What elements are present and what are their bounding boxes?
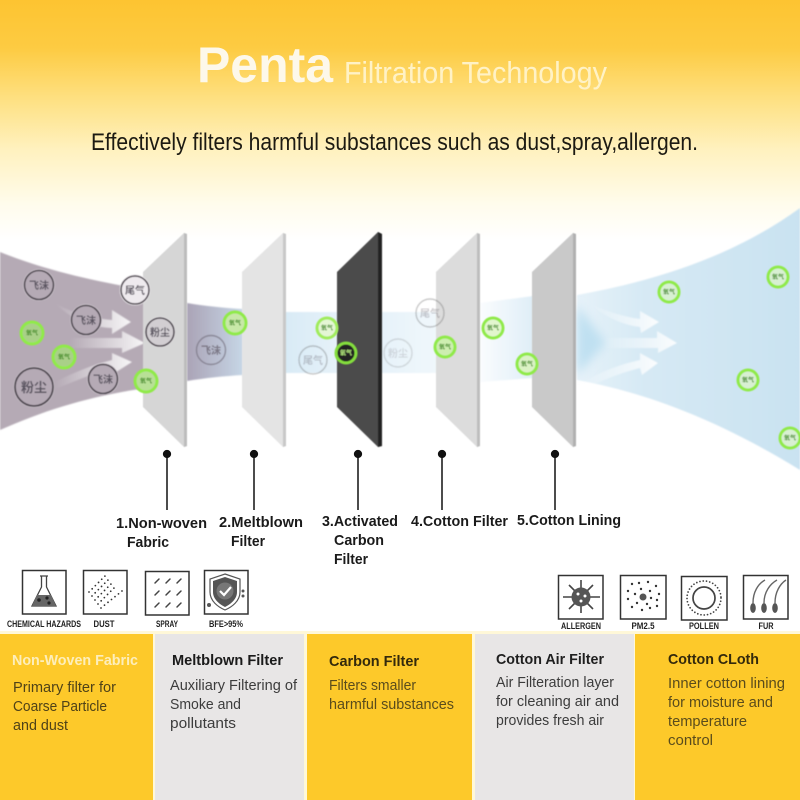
particle: exhaust faded 2: [416, 299, 444, 327]
particle: droplet 2: [70, 304, 102, 336]
panel: carbon filter: Filters smaller: [329, 677, 416, 694]
panel: cotton cloth: control: [668, 732, 713, 749]
oxygen 6: 氧气: [439, 343, 451, 351]
panel: cotton air filter: provides fresh air: [496, 712, 604, 729]
panel: non-woven fabric: Non-Woven Fabric: [12, 652, 138, 669]
icon: spray: [146, 572, 189, 629]
oxygen 8: [517, 354, 537, 374]
label 3: 3.Activated: [322, 513, 398, 530]
panel: non-woven fabric: Primary filter for: [13, 679, 116, 696]
flow: after first filter: [187, 303, 243, 381]
arrow: incoming middle: [70, 331, 145, 353]
pale strip behind panels: [0, 631, 800, 800]
icon: BFE shield: [204, 570, 248, 629]
particle: dust faded: 粉尘: [388, 347, 408, 360]
oxygen 10: [768, 267, 788, 287]
arrow: incoming top: [55, 303, 131, 334]
panel: meltblown filter: Smoke and: [170, 696, 241, 713]
icon: spray: SPRAY: [156, 619, 178, 629]
layer 4: cotton filter: [436, 233, 480, 447]
icon: fur: FUR: [758, 621, 774, 631]
oxygen 3: 氧气: [140, 377, 152, 385]
subtitle: Effectively filters harmful substances such as dust,spray,allergen.: [91, 129, 698, 156]
label 4: 4.Cotton Filter: [411, 513, 508, 530]
layer 3: activated carbon filter: [337, 232, 382, 447]
title: [197, 37, 607, 93]
arrow: outgoing top: [590, 304, 659, 333]
oxygen 9: [659, 282, 679, 302]
air flow bands: [0, 208, 800, 470]
panel: cotton air filter: Air Filteration layer: [496, 674, 614, 691]
particle: exhaust faded 2: 尾气: [420, 307, 440, 320]
oxygen 11: 氧气: [742, 376, 754, 384]
label 2: Filter: [231, 533, 265, 550]
particle: droplet faded: [196, 336, 226, 364]
oxygen on carbon filter: 氧气: [340, 349, 352, 357]
oxygen 1: 氧气: [26, 329, 38, 337]
icon: dust: [84, 570, 127, 629]
particle: dust at filter: [144, 316, 176, 348]
panel: meltblown filter: pollutants: [170, 715, 236, 732]
oxygen 8: 氧气: [521, 360, 533, 368]
particle: droplet 2: 飞沫: [76, 314, 96, 327]
pin 1: [164, 451, 170, 510]
particle: dust large: [14, 366, 54, 408]
particle: droplet 3: [87, 363, 119, 395]
oxygen 12: 氧气: [784, 434, 796, 442]
pin 5: [552, 451, 558, 510]
oxygen 10: 氧气: [772, 273, 784, 281]
oxygen 4: 氧气: [229, 319, 241, 327]
label 1: Fabric: [127, 534, 169, 551]
label 1: 1.Non-woven: [116, 515, 207, 532]
oxygen 7: 氧气: [487, 324, 499, 332]
oxygen 11: [738, 370, 758, 390]
oxygen 6: [435, 337, 455, 357]
oxygen on carbon filter: [336, 343, 356, 363]
leader pins: [164, 451, 558, 510]
icon: chemical hazards: CHEMICAL HAZARDS: [7, 619, 81, 629]
particles: [14, 269, 444, 408]
flow: clean air: [577, 208, 800, 470]
filter layers: [143, 232, 576, 447]
flow: after second filter: [285, 312, 338, 373]
oxygen 3: [135, 370, 157, 392]
oxygen 9: 氧气: [663, 288, 675, 296]
layer 2: meltblown filter: [242, 233, 286, 447]
particle: exhaust: 尾气: [125, 284, 145, 297]
icon: PM2.5: PM2.5: [632, 621, 654, 631]
title: Filtration Technology: [344, 55, 607, 90]
flow: after cotton filter: [480, 296, 533, 382]
panel: carbon filter: [307, 634, 472, 800]
icon: pollen: POLLEN: [689, 621, 719, 631]
arrow: incoming bottom: [55, 353, 132, 389]
panel: cotton cloth: temperature: [668, 713, 747, 730]
particle: dust at filter: 粉尘: [150, 326, 170, 339]
pin 2: [251, 451, 257, 510]
panel: cotton cloth: Inner cotton lining: [668, 675, 785, 692]
layer labels: [116, 512, 621, 568]
panel: non-woven fabric: [0, 634, 153, 800]
panel: non-woven fabric: and dust: [13, 717, 69, 734]
arrow: outgoing middle: [603, 331, 677, 353]
icon: PM2.5: [620, 576, 666, 631]
icon: allergen: ALLERGEN: [561, 621, 601, 631]
label 3: Filter: [334, 551, 368, 568]
airflow arrows: [55, 303, 677, 391]
arrow: outgoing bottom: [580, 353, 658, 391]
oxygen 12: [780, 428, 800, 448]
icon: BFE shield: BFE>95%: [209, 619, 243, 629]
panel: meltblown filter: Auxiliary Filtering of: [170, 677, 298, 694]
panel: carbon filter: Carbon Filter: [329, 653, 419, 670]
oxygen 1: [21, 322, 43, 344]
label 1: [116, 515, 207, 551]
label 3: Carbon: [334, 532, 384, 549]
oxygen 2: 氧气: [58, 353, 70, 361]
panel: cotton air filter: for cleaning air and: [496, 693, 619, 710]
particle: exhaust faded 1: 尾气: [303, 354, 323, 367]
panel: carbon filter: harmful substances: [329, 696, 454, 713]
panel: meltblown filter: [155, 634, 304, 800]
oxygen particles: [21, 267, 800, 448]
label 2: 2.Meltblown: [219, 514, 303, 531]
pin 3: [355, 451, 361, 510]
flow: polluted air: [0, 252, 146, 430]
oxygen 5: 氧气: [321, 324, 333, 332]
panel: cotton cloth: [635, 634, 800, 800]
oxygen 7: [483, 318, 503, 338]
icon: pollen: [682, 576, 727, 631]
panel: cotton air filter: [475, 634, 634, 800]
label 2: [219, 514, 303, 550]
layer 1: non-woven fabric: [143, 233, 187, 447]
particle: exhaust faded 1: [299, 346, 327, 374]
icon: dust: DUST: [94, 619, 115, 629]
title: Penta: [197, 37, 334, 93]
particle: droplet 3: 飞沫: [93, 373, 113, 386]
panel: non-woven fabric: Coarse Particle: [13, 698, 107, 715]
flow: blue glow behind outgoing arrows: [577, 305, 606, 375]
pin 4: [439, 451, 445, 510]
oxygen 5: [317, 318, 337, 338]
layer 5: cotton lining: [532, 233, 576, 447]
particle: droplet 1: 飞沫: [29, 279, 49, 292]
flow: after carbon filter: [381, 312, 437, 373]
label 5: 5.Cotton Lining: [517, 512, 621, 529]
particle: droplet 1: [23, 269, 55, 301]
oxygen 2: [53, 346, 75, 368]
panel: cotton cloth: for moisture and: [668, 694, 773, 711]
particle: exhaust: [120, 274, 150, 306]
label 3: [322, 513, 398, 568]
icon: fur: [744, 576, 788, 631]
yellow gradient background: [0, 0, 800, 240]
particle: dust faded: [384, 339, 412, 367]
particle: dust large: 粉尘: [21, 380, 47, 395]
panel: meltblown filter: Meltblown Filter: [172, 652, 283, 669]
particle: droplet faded: 飞沫: [201, 344, 221, 357]
icon: allergen: [558, 576, 603, 631]
panel: cotton cloth: Cotton CLoth: [668, 651, 759, 668]
oxygen 4: [224, 312, 246, 334]
icon: chemical hazards: [7, 570, 81, 629]
panel: cotton air filter: Cotton Air Filter: [496, 651, 604, 668]
